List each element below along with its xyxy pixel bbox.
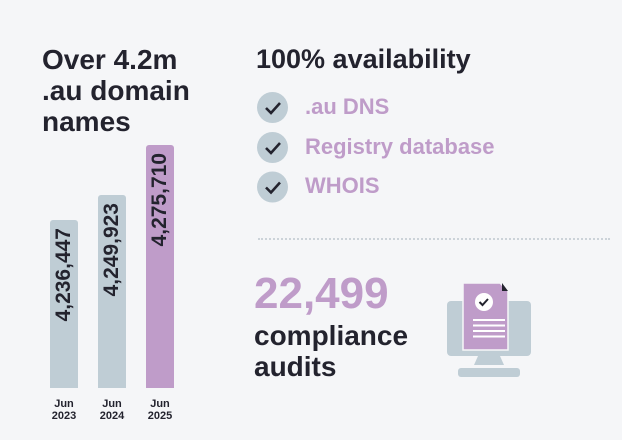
year labels: Jun — [54, 398, 74, 410]
audits stat: audits — [254, 351, 336, 382]
availability list: WHOIS — [305, 173, 380, 198]
year labels: 2025 — [148, 410, 172, 422]
title: Over 4.2m — [42, 44, 177, 75]
bar 2025 — [146, 145, 174, 388]
year labels: 2023 — [52, 410, 76, 422]
title: names — [42, 106, 131, 137]
audits stat — [254, 269, 408, 382]
availability list: Registry database — [305, 134, 495, 159]
availability list — [257, 92, 495, 202]
bar 2025: 4,275,710 — [148, 153, 171, 246]
title: .au domain — [42, 75, 190, 106]
audits stat: compliance — [254, 320, 408, 351]
bar 2024 — [98, 195, 126, 388]
title — [42, 44, 190, 137]
year labels: 2024 — [100, 410, 124, 422]
audits stat: 22,499 — [254, 269, 389, 318]
check icons — [257, 92, 288, 202]
year labels: Jun — [150, 398, 170, 410]
bar 2023 — [50, 220, 78, 388]
icon: monitor with document — [447, 283, 531, 377]
bar 2024: 4,249,923 — [100, 203, 123, 296]
bar chart — [50, 145, 174, 422]
bar 2023: 4,236,447 — [52, 228, 75, 321]
availability list: .au DNS — [305, 94, 389, 119]
heading: availability: 100% availability — [256, 44, 471, 74]
year labels: Jun — [102, 398, 122, 410]
year labels — [52, 398, 172, 422]
